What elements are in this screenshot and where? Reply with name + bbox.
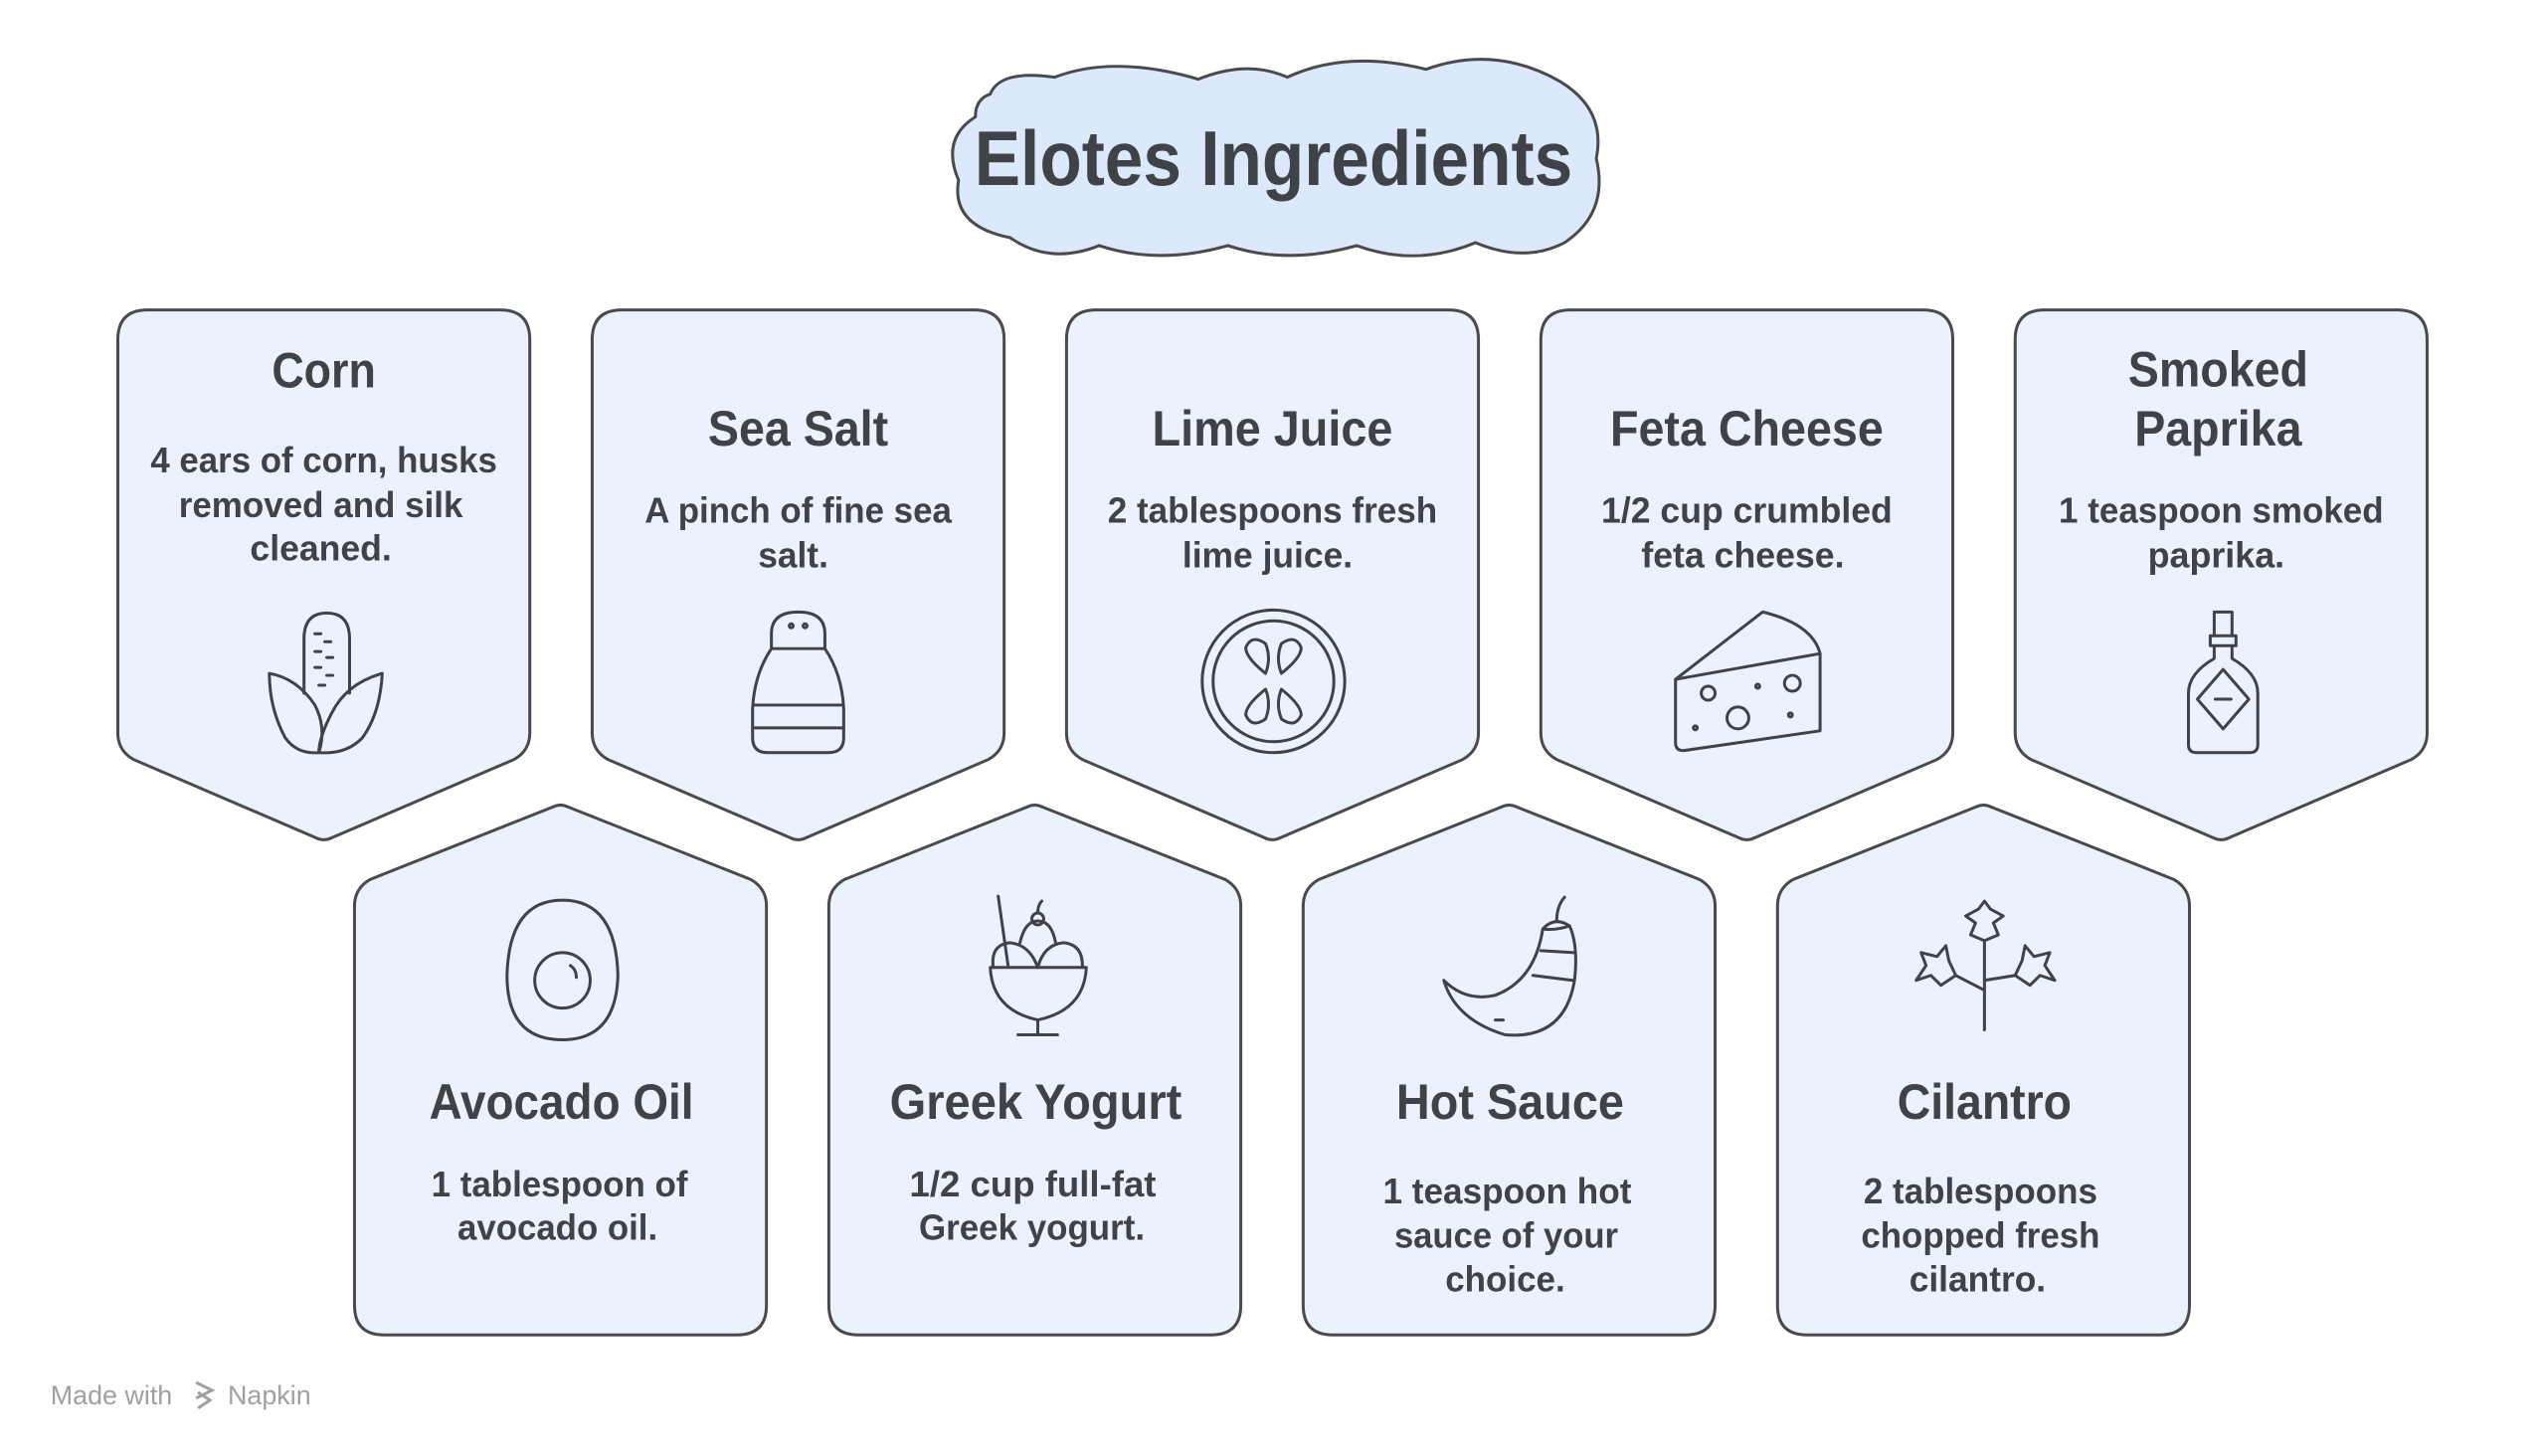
icon: bottle <box>2188 612 2258 753</box>
panel: smoked paprika: Paprika <box>2134 401 2302 456</box>
panel: corn <box>117 310 530 839</box>
panel: sea salt: salt. <box>758 536 828 576</box>
panel: cilantro: cilantro. <box>1910 1259 2046 1299</box>
panel: feta cheese: feta cheese. <box>1641 536 1844 576</box>
panel: greek yogurt: Greek yogurt. <box>919 1208 1145 1248</box>
panel: lime juice <box>1066 310 1479 839</box>
panel: hot sauce <box>1303 806 1716 1335</box>
panel: smoked paprika: Smoked <box>2128 341 2308 397</box>
panel: greek yogurt <box>828 806 1241 1335</box>
icon: chili pepper <box>1444 897 1575 1035</box>
panel: hot sauce: 1 teaspoon hot <box>1382 1172 1631 1211</box>
panel: lime juice: 2 tablespoons fresh <box>1108 491 1437 531</box>
icon: corn <box>270 613 382 753</box>
icon: cilantro <box>1916 901 2055 1030</box>
icon: lime <box>1202 610 1345 753</box>
panel: corn: removed and silk <box>179 485 463 525</box>
panel: smoked paprika: paprika. <box>2148 536 2284 576</box>
panel: corn: cleaned. <box>250 529 392 569</box>
icon: avocado <box>507 900 618 1039</box>
panel: sea salt: Sea Salt <box>708 401 888 456</box>
panel: avocado oil: Avocado Oil <box>430 1074 693 1130</box>
panel: smoked paprika: 1 teaspoon smoked <box>2059 491 2384 531</box>
panel: avocado oil: 1 tablespoon of <box>432 1165 688 1204</box>
panel: sea salt <box>592 310 1004 839</box>
title: Elotes Ingredients <box>975 116 1572 202</box>
panel: greek yogurt: 1/2 cup full-fat <box>910 1165 1157 1204</box>
icon: salt shaker <box>753 612 843 753</box>
panel: hot sauce: sauce of your <box>1394 1216 1618 1256</box>
panel: corn: 4 ears of corn, husks <box>150 441 497 480</box>
panel: smoked paprika <box>2015 310 2427 839</box>
icon: sundae <box>991 896 1086 1035</box>
panel: hot sauce: choice. <box>1445 1259 1565 1299</box>
panel: corn: Corn <box>272 342 376 398</box>
panel: feta cheese: Feta Cheese <box>1610 401 1884 456</box>
title <box>953 60 1599 256</box>
panel: cilantro: Cilantro <box>1898 1074 2072 1130</box>
panel: greek yogurt: Greek Yogurt <box>890 1074 1182 1130</box>
panel: lime juice: Lime Juice <box>1152 401 1392 456</box>
footer: made with napkin <box>51 1380 311 1410</box>
panel: lime juice: lime juice. <box>1182 536 1353 576</box>
panel: feta cheese <box>1541 310 1953 839</box>
panel: hot sauce: Hot Sauce <box>1396 1074 1624 1130</box>
footer: made with napkin: Napkin <box>228 1380 311 1410</box>
panel: sea salt: A pinch of fine sea <box>644 491 953 531</box>
panel: avocado oil: avocado oil. <box>457 1208 657 1248</box>
panel: feta cheese: 1/2 cup crumbled <box>1601 491 1893 531</box>
footer: made with napkin: Made with <box>51 1380 172 1410</box>
panel: cilantro: 2 tablespoons <box>1864 1172 2097 1211</box>
panel: cilantro: chopped fresh <box>1861 1216 2099 1256</box>
panel: avocado oil <box>354 806 767 1335</box>
icon: cheese <box>1676 612 1820 751</box>
panel: cilantro <box>1777 806 2189 1335</box>
